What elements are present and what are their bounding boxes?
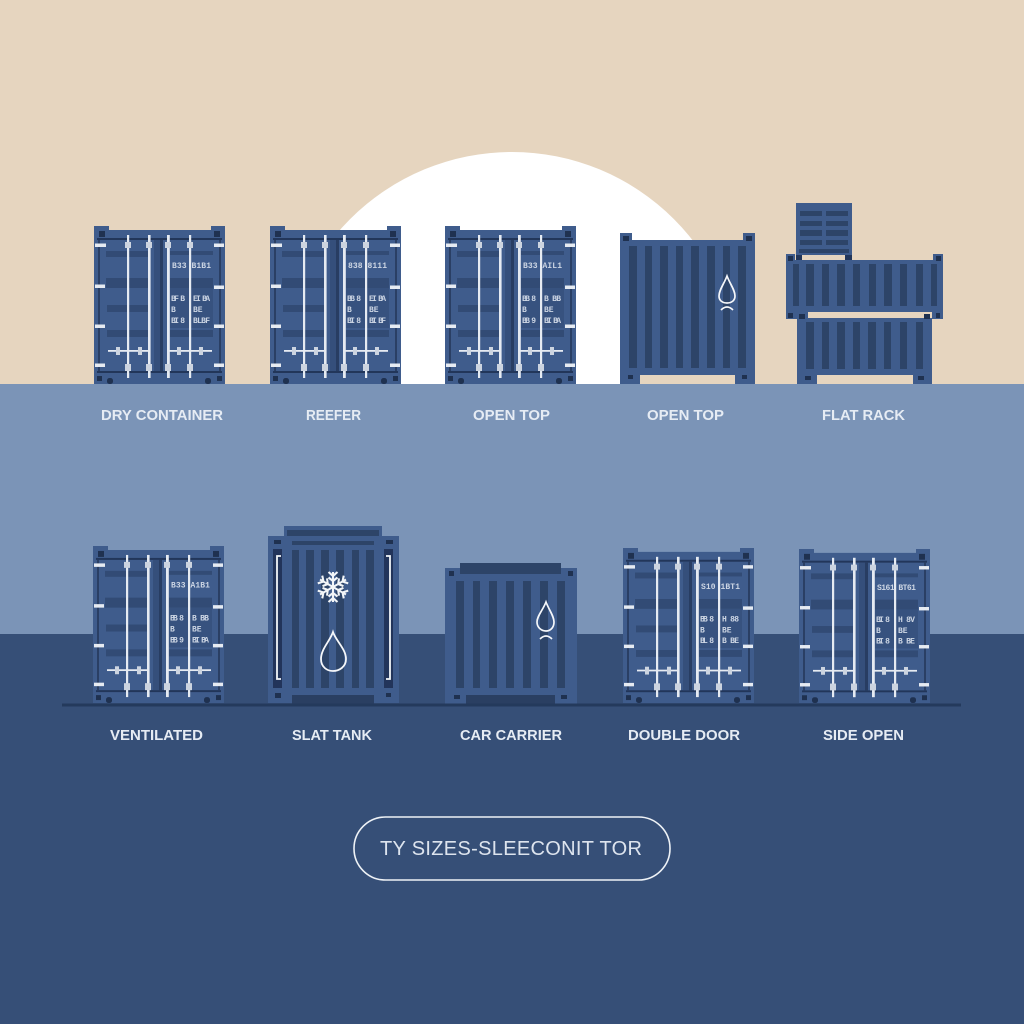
top louvred box xyxy=(796,203,852,260)
brackets xyxy=(277,556,281,679)
container stack: flat rack xyxy=(786,203,943,384)
container: open top door: BE xyxy=(544,306,554,315)
label: ventilated: VENTILATED xyxy=(110,728,203,744)
container: dry container: BF B xyxy=(171,295,185,304)
container: car carrier xyxy=(445,563,577,704)
container: ventilated: BB 8 xyxy=(170,615,184,624)
container: reefer: 838 8111 xyxy=(348,262,387,271)
container: double door: H 88 xyxy=(722,616,739,625)
icon: drop with chevron xyxy=(719,276,735,310)
container: dry container xyxy=(94,226,225,384)
container: ventilated: BE xyxy=(192,626,202,634)
container: reefer: EI BA xyxy=(369,295,386,304)
container: dry container: BLBF xyxy=(193,317,210,326)
white sun xyxy=(283,152,741,610)
icon: water drop xyxy=(321,632,346,671)
container: reefer xyxy=(270,226,401,384)
container: ventilated: B xyxy=(170,626,175,634)
container: dry container: BI 8 xyxy=(171,317,185,326)
label: open top: OPEN TOP xyxy=(473,408,550,424)
container: reefer: B xyxy=(347,306,352,315)
container: side open xyxy=(799,549,930,703)
label: open top: OPEN TOP xyxy=(647,408,724,424)
container: side open: BE xyxy=(898,627,908,636)
container: side open: S161 BT61 xyxy=(877,584,916,593)
container: ventilated: BI BA xyxy=(192,636,209,645)
container: double door: S10 1BT1 xyxy=(701,583,740,592)
container: side open: H 8V xyxy=(898,616,915,625)
container: dry container: B xyxy=(171,306,176,315)
pill caption: TY SIZES-SLEECONIT TOR xyxy=(380,838,642,860)
container: double door: BL 8 xyxy=(700,637,714,646)
container: reefer: BE xyxy=(369,306,379,315)
pill caption xyxy=(354,817,670,880)
container: open top door: BI BA xyxy=(544,317,561,326)
background: sand sky xyxy=(0,0,1024,384)
container: ventilated: B33 A1B1 xyxy=(171,582,210,591)
label: slat tank: SLAT TANK xyxy=(292,728,373,744)
middle container xyxy=(786,254,943,319)
container: open top door: BB 8 xyxy=(522,295,536,304)
icon: drop with chevron xyxy=(537,602,554,639)
container: double door: BE xyxy=(722,626,732,635)
container: open top ribbed xyxy=(620,233,755,384)
container: dry container: B33 B1B1 xyxy=(172,262,211,271)
container: open top door: B BB xyxy=(544,295,561,304)
container: dry container: EI BA xyxy=(193,295,210,304)
label: dry container: DRY CONTAINER xyxy=(101,408,224,424)
label: flat rack: FLAT RACK xyxy=(822,408,906,424)
label: reefer: REEFER xyxy=(306,408,361,424)
container: open top door: BB 9 xyxy=(522,317,536,326)
lower container xyxy=(797,318,932,384)
container: open top door: B xyxy=(522,306,527,315)
icon: snowflake xyxy=(318,572,348,602)
label: double door: DOUBLE DOOR xyxy=(628,728,741,744)
container: side open: BI 8 xyxy=(876,638,890,647)
container: reefer: BI BF xyxy=(369,317,386,326)
container: double door xyxy=(623,548,754,703)
label: car carrier: CAR CARRIER xyxy=(460,728,563,744)
label: side open: SIDE OPEN xyxy=(823,728,904,744)
container: side open: B xyxy=(876,627,881,636)
ground line xyxy=(62,704,961,706)
container: double door: B xyxy=(700,626,705,635)
background: dark navy floor xyxy=(0,634,1024,1024)
container: reefer: BB 8 xyxy=(347,295,361,304)
container: double door: BB 8 xyxy=(700,616,714,625)
container: side open: BI 8 xyxy=(876,616,890,625)
background: mid blue band xyxy=(0,384,1024,634)
container: ventilated xyxy=(93,546,224,703)
container: dry container: BE xyxy=(193,306,203,315)
container: open top door xyxy=(445,226,576,384)
container: ventilated: B BB xyxy=(192,615,209,624)
container: ventilated: BB 9 xyxy=(170,636,184,645)
container: double door: B BE xyxy=(722,637,739,646)
container: reefer: BI 8 xyxy=(347,317,361,326)
container: open top door: B33 AIL1 xyxy=(523,262,562,271)
container: side open: B BE xyxy=(898,638,915,647)
container: slat tank xyxy=(268,526,399,704)
